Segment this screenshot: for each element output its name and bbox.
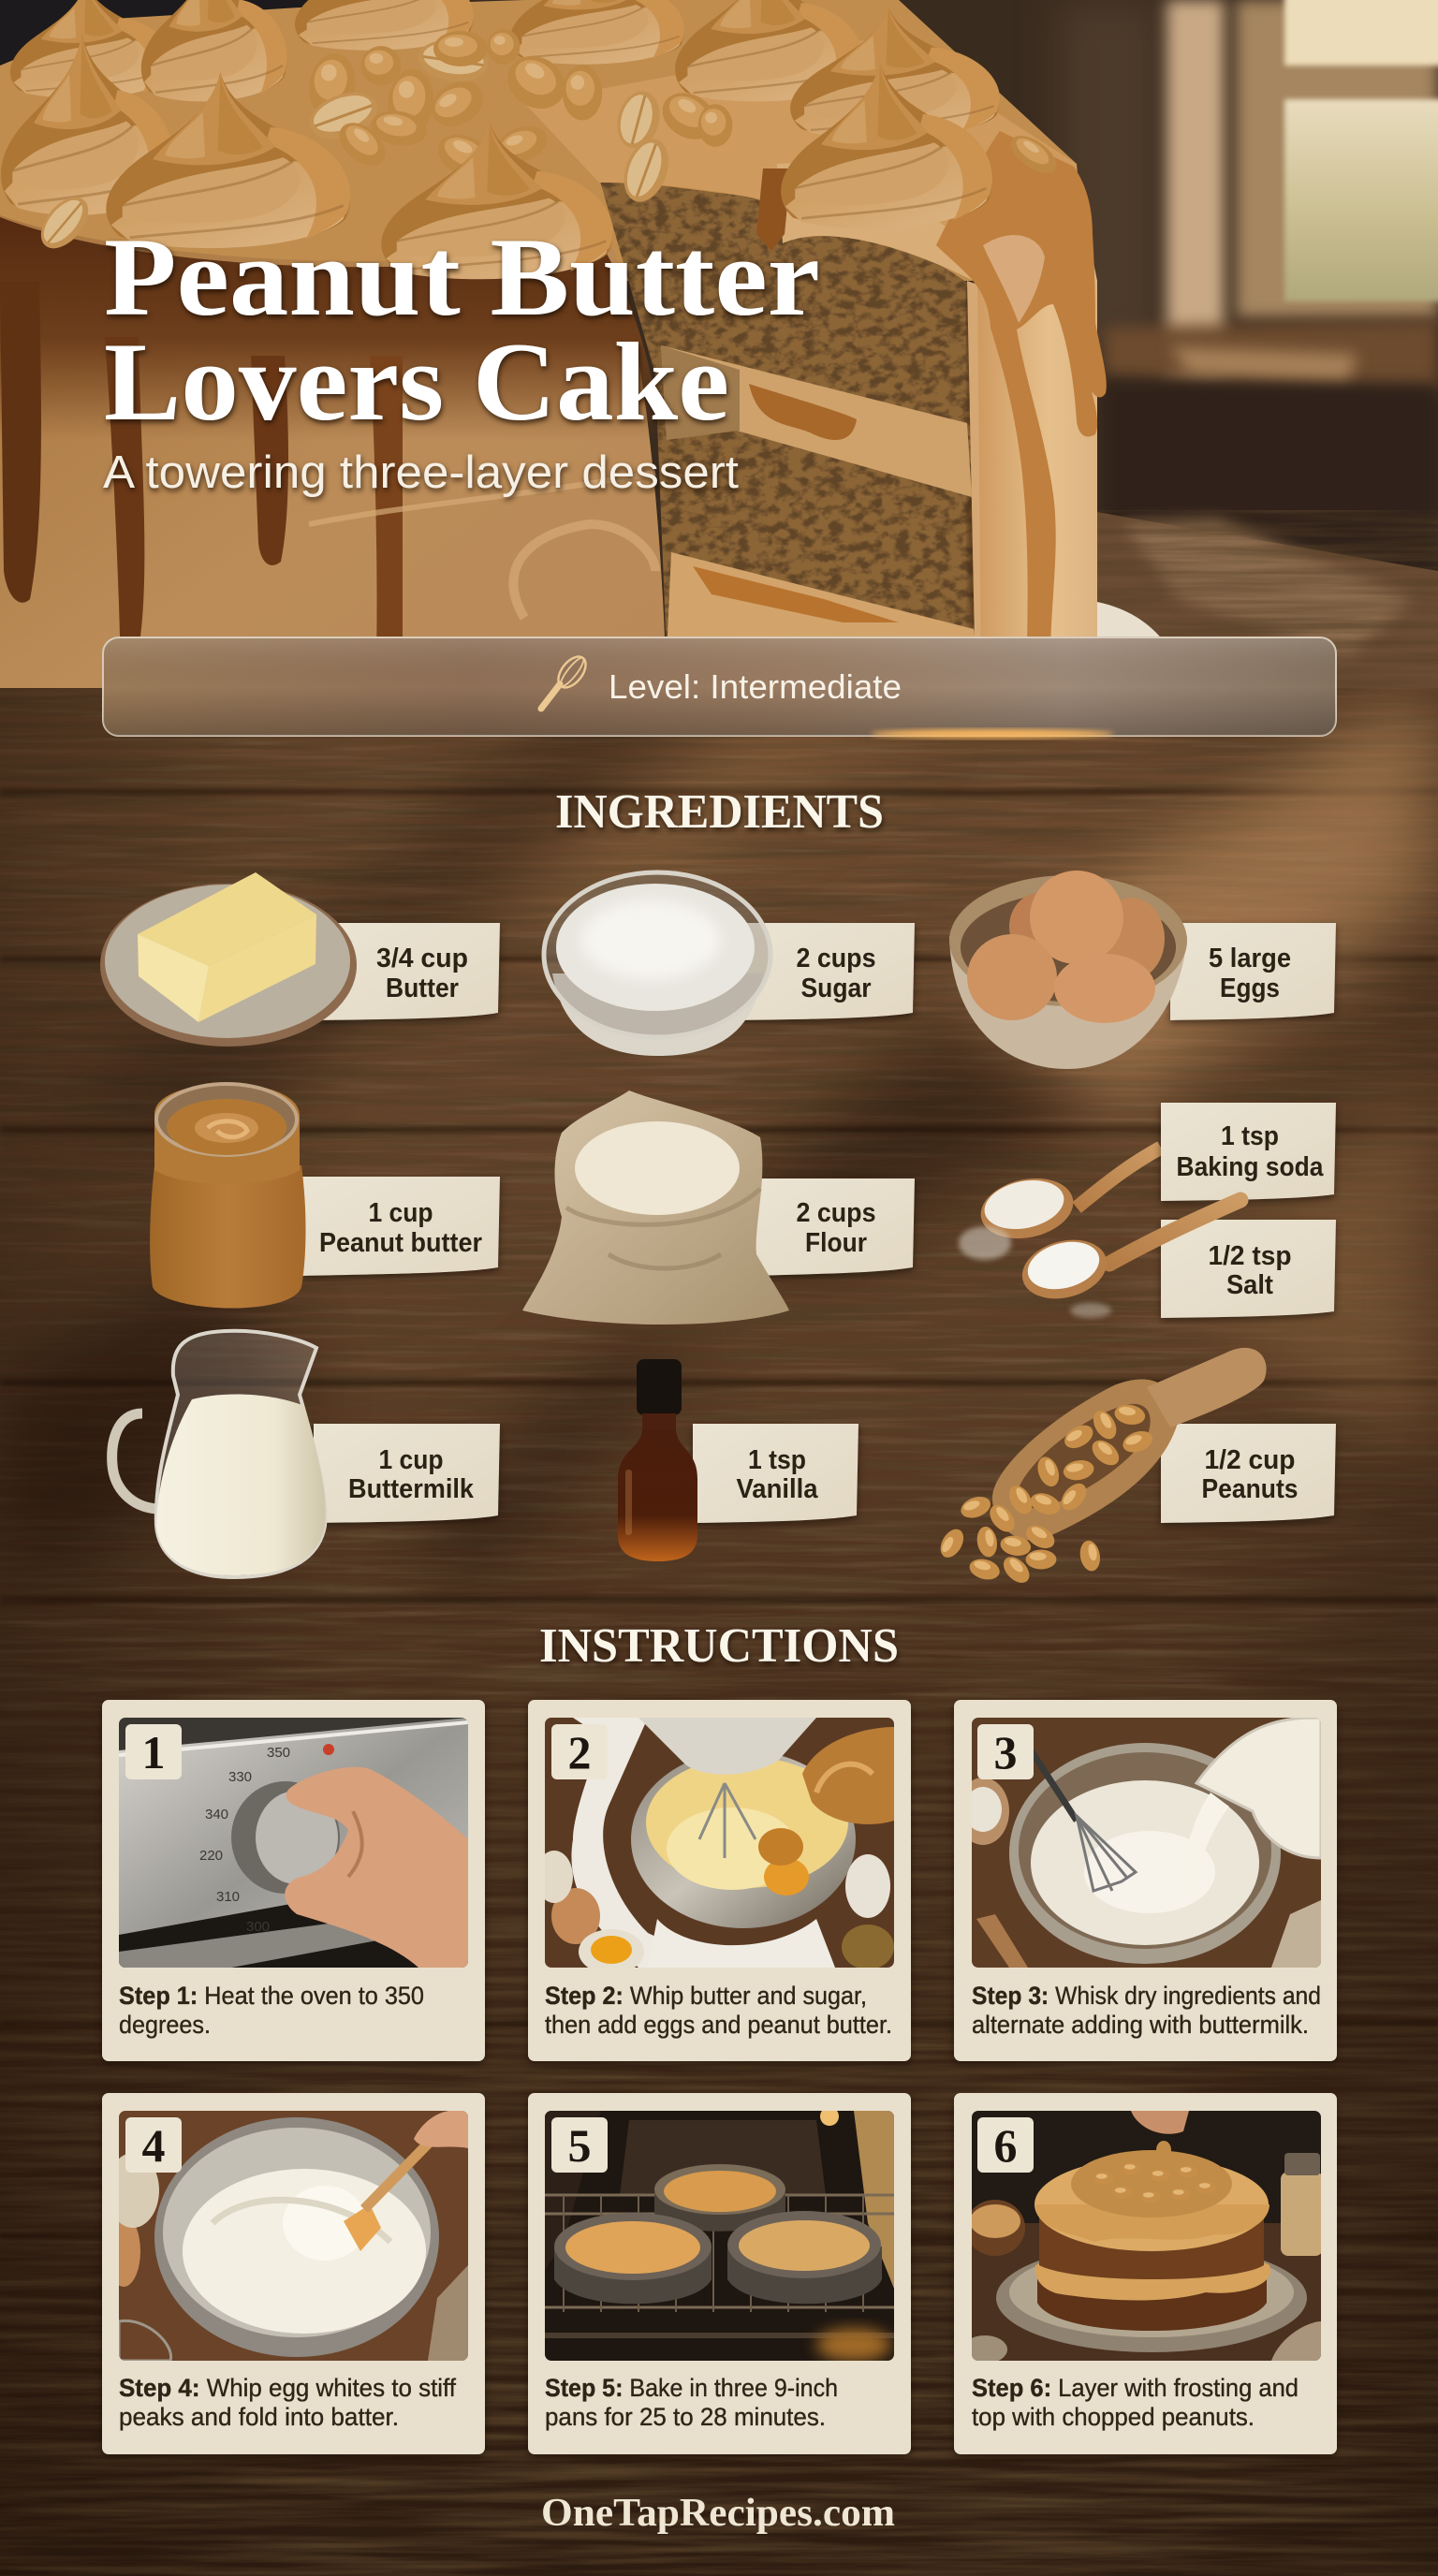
label: salt: Salt (1226, 1270, 1273, 1300)
footer website: OneTapRecipes.com (541, 2492, 895, 2535)
image: oven dial: 220 (199, 1848, 223, 1864)
label: flour: 2 cups (796, 1198, 876, 1228)
icon: peanuts in wooden scoop (936, 1348, 1267, 1588)
image: egg whites in bowl (107, 2110, 468, 2361)
caption: step 5: pans for 25 to 28 minutes. (545, 2403, 826, 2431)
caption: step 3: alternate adding with buttermilk. (972, 2011, 1309, 2039)
badge: 5 (551, 2117, 608, 2173)
badge: 6: 6 (994, 2119, 1017, 2172)
label: peanuts: 1/2 cup (1204, 1445, 1296, 1475)
level text: Level: Intermediate (609, 667, 902, 706)
peanuts on top (32, 29, 1063, 257)
caption: step 3 (972, 1982, 1321, 2039)
label: peanut butter: Peanut butter (319, 1228, 482, 1258)
card: step 5 (528, 2093, 911, 2454)
icon: baking soda spoon (959, 1148, 1161, 1260)
badge: 4 (125, 2117, 182, 2173)
heading: instructions: INSTRUCTIONS (539, 1619, 899, 1673)
label: sugar: Sugar (801, 973, 871, 1003)
badge: 3 (977, 1724, 1034, 1779)
hero photo: cake on table (0, 0, 1438, 688)
badge: 4: 4 (142, 2119, 165, 2172)
image: oven dial: 350 (267, 1745, 290, 1761)
hero room background and window (0, 0, 1438, 688)
card: step 2 (528, 1700, 911, 2061)
caption: step 6 (972, 2374, 1299, 2431)
icon: butter on plate (100, 872, 357, 1046)
label: salt (1161, 1220, 1336, 1318)
label: baking soda: Baking soda (1176, 1152, 1324, 1182)
label: flour: Flour (805, 1228, 867, 1258)
caramel band and drips (0, 217, 660, 655)
label: peanut butter (302, 1177, 500, 1276)
label: eggs: Eggs (1220, 973, 1280, 1003)
frosting swoosh on cake side (309, 473, 655, 618)
heading: ingredients: INGREDIENTS (555, 785, 884, 839)
image: oven dial (119, 1708, 468, 1968)
label: sugar (740, 923, 915, 1020)
image: oven dial: 300 (246, 1919, 270, 1935)
icon: sugar bowl (544, 872, 770, 1056)
icon: peanut butter jar (150, 1084, 305, 1309)
badge: 3: 3 (994, 1726, 1017, 1778)
card: step 4 (102, 2093, 485, 2454)
cake top surface (0, 0, 1077, 281)
card: step 6 (954, 2093, 1337, 2454)
cut slice layers (601, 183, 981, 637)
label: baking soda: 1 tsp (1221, 1121, 1279, 1151)
title (104, 214, 820, 444)
label: sugar: 2 cups (796, 944, 876, 973)
label: butter: Butter (386, 973, 459, 1003)
badge: 2 (551, 1724, 608, 1779)
caption: step 1: degrees. (119, 2011, 211, 2039)
image: whisking flour (957, 1718, 1321, 1968)
caption: step 3: Step 3: Whisk dry ingredients and (972, 1982, 1321, 2010)
subtitle: A towering three-layer dessert (103, 447, 739, 498)
icon: flour sack (522, 1090, 789, 1325)
label: eggs: 5 large (1209, 944, 1291, 973)
caption: step 4: Step 4: Whip egg whites to stiff (119, 2374, 456, 2402)
icon: salt spoon (1016, 1200, 1240, 1318)
image: stand mixer (536, 1718, 894, 1974)
label: buttermilk: Buttermilk (348, 1474, 475, 1504)
image: oven dial: 330 (228, 1769, 252, 1785)
cake body frosting (0, 215, 667, 688)
icon: buttermilk pitcher (112, 1331, 326, 1577)
outer right frosting with caramel (936, 131, 1107, 688)
caption: step 5: Step 5: Bake in three 9-inch (545, 2374, 838, 2402)
label: buttermilk (314, 1424, 500, 1523)
piped frosting swirls (1, 0, 1000, 248)
image: finished cake (962, 2111, 1323, 2364)
label: vanilla (693, 1424, 858, 1523)
label: salt: 1/2 tsp (1208, 1241, 1292, 1271)
caption: step 1: Step 1: Heat the oven to 350 (119, 1982, 424, 2010)
badge: 6 (977, 2117, 1034, 2173)
badge: 2: 2 (567, 1726, 592, 1778)
label: baking soda (1161, 1103, 1336, 1201)
image: pans in oven (545, 2107, 894, 2362)
label: vanilla: Vanilla (736, 1474, 818, 1504)
label: vanilla: 1 tsp (748, 1445, 806, 1475)
frosted top surface (526, 40, 1078, 227)
label: butter (318, 923, 500, 1020)
card: step 1 (102, 1700, 485, 2061)
card: step 3 (954, 1700, 1337, 2061)
image: oven dial: 310 (216, 1889, 240, 1905)
label: butter: 3/4 cup (376, 944, 468, 973)
label: buttermilk: 1 cup (378, 1445, 444, 1475)
label: flour (754, 1178, 915, 1276)
caption: step 4 (119, 2374, 456, 2431)
caption: step 1 (119, 1982, 424, 2039)
badge: 5: 5 (567, 2119, 592, 2172)
caption: step 4: peaks and fold into batter. (119, 2403, 399, 2431)
caption: step 2 (545, 1982, 892, 2039)
label: peanuts: Peanuts (1202, 1474, 1298, 1504)
icon: whisk (541, 651, 591, 709)
badge: 1: 1 (142, 1726, 165, 1778)
badge: 1 (125, 1724, 182, 1779)
icon: vanilla bottle (618, 1359, 697, 1561)
label: peanut butter: 1 cup (369, 1198, 433, 1228)
label: eggs (1170, 923, 1336, 1020)
image: oven dial: 340 (205, 1807, 228, 1822)
caption: step 2: then add eggs and peanut butter. (545, 2011, 892, 2039)
level bar (103, 637, 1336, 739)
icon: eggs in bowl (949, 871, 1187, 1069)
caption: step 5 (545, 2374, 838, 2431)
caption: step 2: Step 2: Whip butter and sugar, (545, 1982, 867, 2010)
title: Peanut Butter (104, 214, 820, 339)
label: peanuts (1161, 1424, 1336, 1523)
caption: step 6: Step 6: Layer with frosting and (972, 2374, 1299, 2402)
title: Lovers Cake (104, 319, 729, 444)
caption: step 6: top with chopped peanuts. (972, 2403, 1255, 2431)
front swirl (381, 122, 612, 279)
